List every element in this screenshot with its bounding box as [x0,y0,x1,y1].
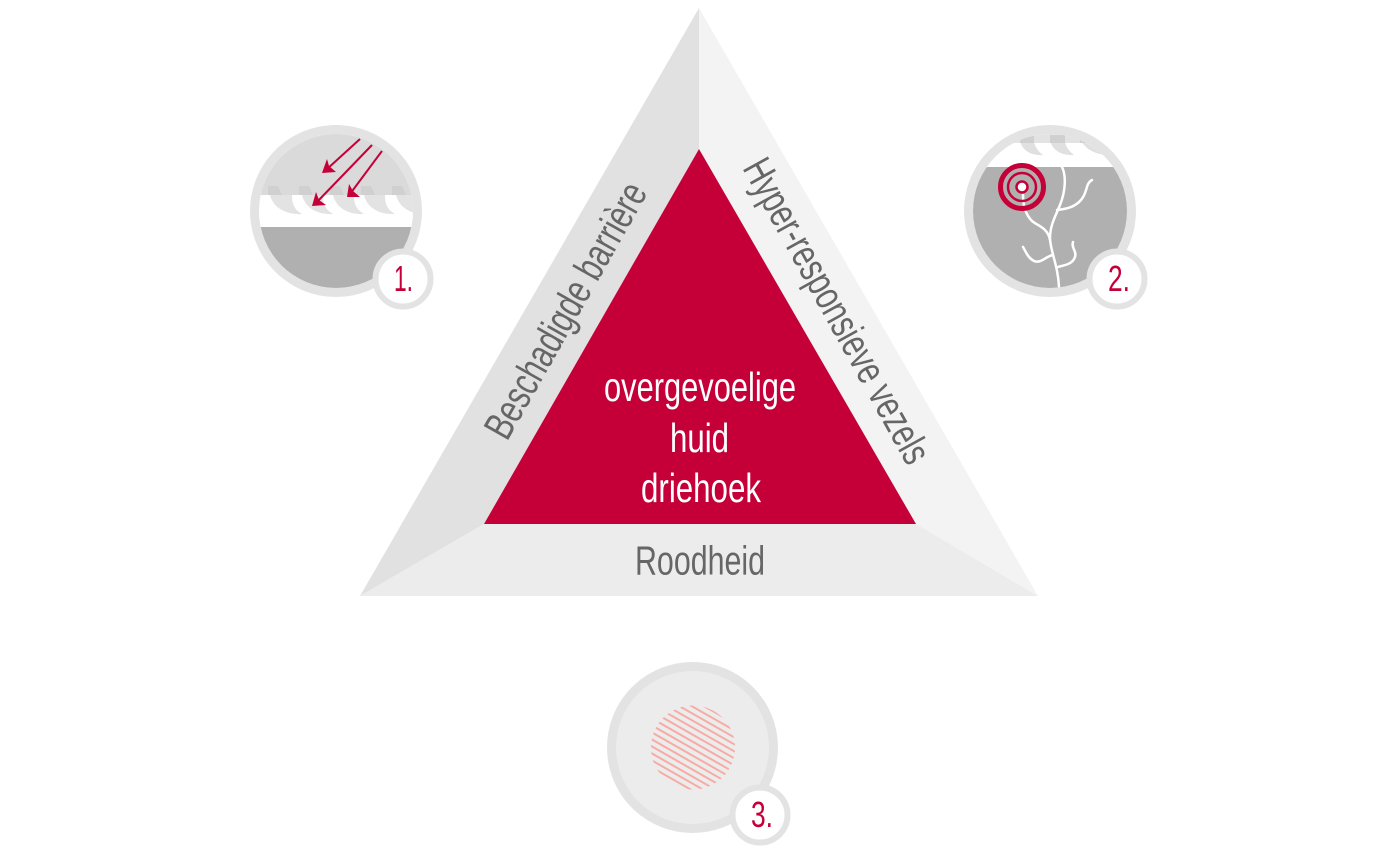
center title [604,364,796,511]
badge 3: 3. [751,794,773,835]
face: left [360,8,699,596]
face: bottom [360,524,1038,596]
icon: arrows [312,139,382,206]
badge 1 [376,252,430,306]
icon 2: hyper-responsive fibres [964,125,1144,306]
center title: huid [670,415,729,461]
triangle diagram [360,8,1038,596]
icon 1: damaged barrier [250,125,430,306]
label: Beschadigde barrière: Beschadigde barrière [475,174,656,446]
badge 1: 1. [394,258,413,299]
icon 3: redness [612,664,788,842]
center title: driehoek [641,465,761,511]
face: right [699,8,1038,596]
center title: overgevoelige [604,364,796,410]
badge 2 [1090,252,1144,306]
icon: nerve fibres [1023,167,1092,287]
label: Hyper-responsieve vezels: Hyper-responsieve vezels [734,150,940,471]
icon: target [1000,166,1044,208]
badge 3 [732,788,788,842]
center triangle [484,149,916,524]
badge 2: 2. [1108,258,1130,299]
label: Roodheid: Roodheid [635,538,765,584]
hatched red patch [651,706,735,790]
